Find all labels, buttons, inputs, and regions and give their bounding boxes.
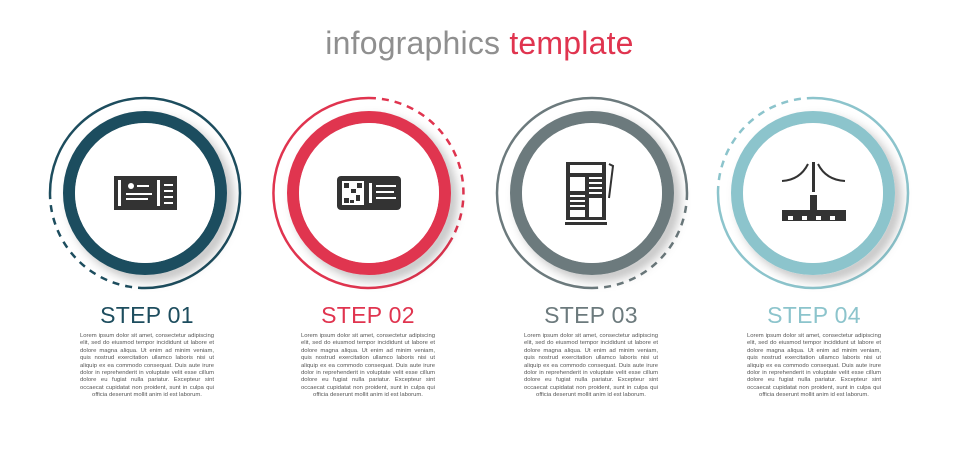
step 04 heading: STEP 04 — [767, 302, 861, 328]
title: infographics template — [325, 25, 634, 61]
step 03 heading: STEP 03 — [544, 302, 638, 328]
step 02 text: Lorem ipsum dolor sit amet, consectetur adipiscing elit, sed do eiusmod tempor incididunt ut labore et dolore magna aliqua. Ut enim ad minim veniam, quis nostrud exercitation ullamco laboris nisi ut aliquip ex ea commodo consequat. Duis aute irure dolor in reprehenderit in voluptate velit esse cillum dolore eu fugiat nulla pariatur. Excepteur sint occaecat cupidatat non proident, sunt in culpa qui officia deserunt mollit anim id est laborum. — [301, 333, 435, 398]
icon: ticket — [114, 176, 177, 210]
step 01 heading: STEP 01 — [100, 302, 194, 328]
step 03 text: Lorem ipsum dolor sit amet, consectetur adipiscing elit, sed do eiusmod tempor incididunt ut labore et dolore magna aliqua. Ut enim ad minim veniam, quis nostrud exercitation ullamco laboris nisi ut aliquip ex ea commodo consequat. Duis aute irure dolor in reprehenderit in voluptate velit esse cillum dolore eu fugiat nulla pariatur. Excepteur sint occaecat cupidatat non proident, sunt in culpa qui officia deserunt mollit anim id est laborum. — [524, 333, 658, 398]
circle: step 03 — [497, 98, 687, 288]
circle: step 02 — [273, 98, 463, 288]
icon: stanchion — [782, 162, 846, 221]
circle: step 04 — [718, 98, 908, 288]
icon: boarding pass with qr — [337, 176, 401, 210]
step 02 heading: STEP 02 — [321, 302, 415, 328]
circle: step 01 — [50, 98, 240, 288]
step 01 text: Lorem ipsum dolor sit amet, consectetur adipiscing elit, sed do eiusmod tempor incididunt ut labore et dolore magna aliqua. Ut enim ad minim veniam, quis nostrud exercitation ullamco laboris nisi ut aliquip ex ea commodo consequat. Duis aute irure dolor in reprehenderit in voluptate velit esse cillum dolore eu fugiat nulla pariatur. Excepteur sint occaecat cupidatat non proident, sunt in culpa qui officia deserunt mollit anim id est laborum. — [80, 333, 214, 398]
icon: newspaper — [565, 162, 613, 225]
step 04 text: Lorem ipsum dolor sit amet, consectetur adipiscing elit, sed do eiusmod tempor incididunt ut labore et dolore magna aliqua. Ut enim ad minim veniam, quis nostrud exercitation ullamco laboris nisi ut aliquip ex ea commodo consequat. Duis aute irure dolor in reprehenderit in voluptate velit esse cillum dolore eu fugiat nulla pariatur. Excepteur sint occaecat cupidatat non proident, sunt in culpa qui officia deserunt mollit anim id est laborum. — [747, 333, 881, 398]
